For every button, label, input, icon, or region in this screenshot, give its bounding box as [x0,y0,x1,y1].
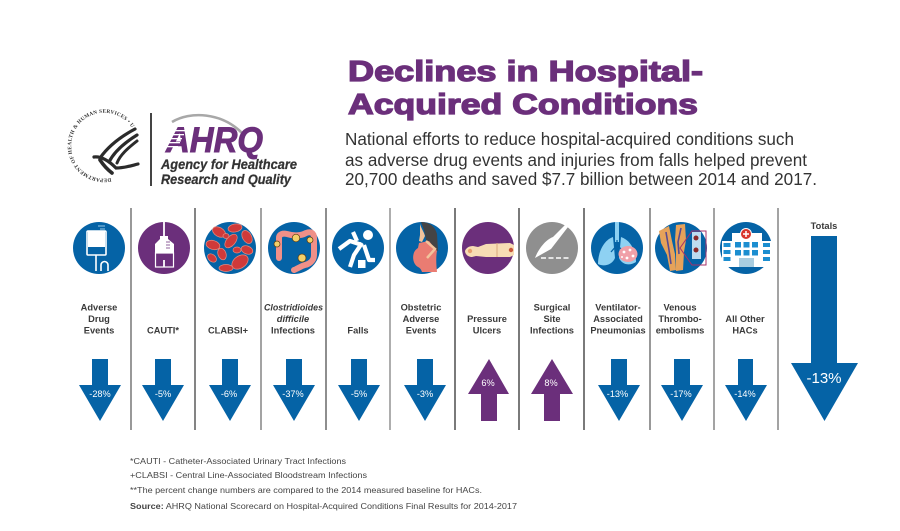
intro text: National efforts to reduce hospital-acquired conditions such [345,129,794,149]
footnotes [130,456,517,511]
labels: Venous [663,302,697,312]
labels: CAUTI* [147,326,179,336]
icon: falls [332,222,384,274]
logo: AHRQ: Research and Quality [161,172,292,187]
arrow: falls -5%: -5% [351,389,367,399]
labels: embolisms [656,326,704,336]
icon: CLABSI blood cells [204,222,256,274]
labels: Site [543,314,561,324]
labels: CLABSI+ [208,326,249,336]
labels: Infections [530,326,574,336]
arrow: surgical site 8%: 8% [544,378,558,388]
labels: Ventilator- [595,302,641,312]
icon: obstetric pregnant woman [396,222,448,274]
arrow: pressure ulcers 6%: 6% [481,378,495,388]
labels: Adverse [81,302,117,312]
arrow: obstetric -3% [404,359,446,421]
footnotes: +CLABSI - Central Line-Associated Bloodstream Infections [130,470,367,480]
arrow: C. difficile -37% [273,359,315,421]
arrow: CLABSI -6%: -6% [221,389,237,399]
footnotes: *CAUTI - Catheter-Associated Urinary Tract Infections [130,456,346,466]
intro text [345,129,817,189]
arrow: VTE -17%: -17% [670,389,692,399]
labels: difficile [277,314,309,324]
logo: AHRQ: AHRQ [165,121,263,160]
labels: Events [84,326,114,336]
labels: Falls [347,326,369,336]
arrow: CAUTI -5%: -5% [155,389,171,399]
arrow: falls -5% [338,359,380,421]
logo: AHRQ [158,115,297,187]
arrow: CLABSI -6% [209,359,251,421]
labels [81,221,837,336]
arrow: all other HACs -14%: -14% [734,389,756,399]
icon: pressure ulcers [462,222,514,274]
labels: Infections [271,326,315,336]
icon: adverse drug events IV bag [73,222,125,274]
labels: Surgical [534,302,570,312]
labels: Ulcers [473,326,501,336]
footnotes: Source: AHRQ National Scorecard on Hospital-Acquired Conditions Final Results for 2014-2017 [130,501,517,511]
icon: C. difficile colon [268,222,320,274]
footnotes: **The percent change numbers are compared to the 2014 measured baseline for HACs. [130,485,482,495]
labels: Pressure [467,314,507,324]
labels: Thrombo- [658,314,702,324]
labels: Events [406,326,436,336]
labels: All Other [725,314,765,324]
labels: Clostridioides [264,302,323,312]
title: Acquired Conditions [348,89,698,121]
icon: all other HACs hospital [720,222,772,274]
icon: ventilator-associated lungs [591,222,643,274]
arrow: total -13% [791,236,858,421]
labels: Obstetric [401,302,441,312]
intro text: 20,700 deaths and saved $7.7 billion between 2014 and 2017. [345,169,817,189]
arrow: obstetric -3%: -3% [417,389,433,399]
arrow: C. difficile -37%: -37% [282,389,304,399]
arrow: CAUTI -5% [142,359,184,421]
logo: HHS seal [68,109,140,182]
icon: CAUTI catheter bag [138,222,190,274]
arrow: adverse drug events -28% [79,359,121,421]
arrow: total -13%: -13% [806,370,842,387]
arrow: VAP -13%: -13% [607,389,628,399]
arrow: VAP -13% [598,359,640,421]
title [348,56,703,121]
icon: venous thromboembolisms legs [655,222,707,274]
labels: Pneumonias [590,326,646,336]
title: Declines in Hospital- [348,56,703,88]
labels: Associated [593,314,643,324]
intro text: as adverse drug events and injuries from falls helped prevent [345,150,807,170]
labels: Adverse [403,314,439,324]
arrow: surgical site 8% [531,359,573,421]
icon: surgical site scalpel [526,222,578,274]
labels: Drug [88,314,110,324]
arrow: pressure ulcers 6% [468,359,509,421]
arrow: all other HACs -14% [725,359,767,421]
labels: HACs [732,326,758,336]
labels: Totals [811,221,837,231]
arrow: adverse drug events -28%: -28% [89,389,111,399]
arrow: VTE -17% [661,359,703,421]
logo divider [150,113,152,186]
logo: AHRQ: Agency for Healthcare [160,157,297,172]
